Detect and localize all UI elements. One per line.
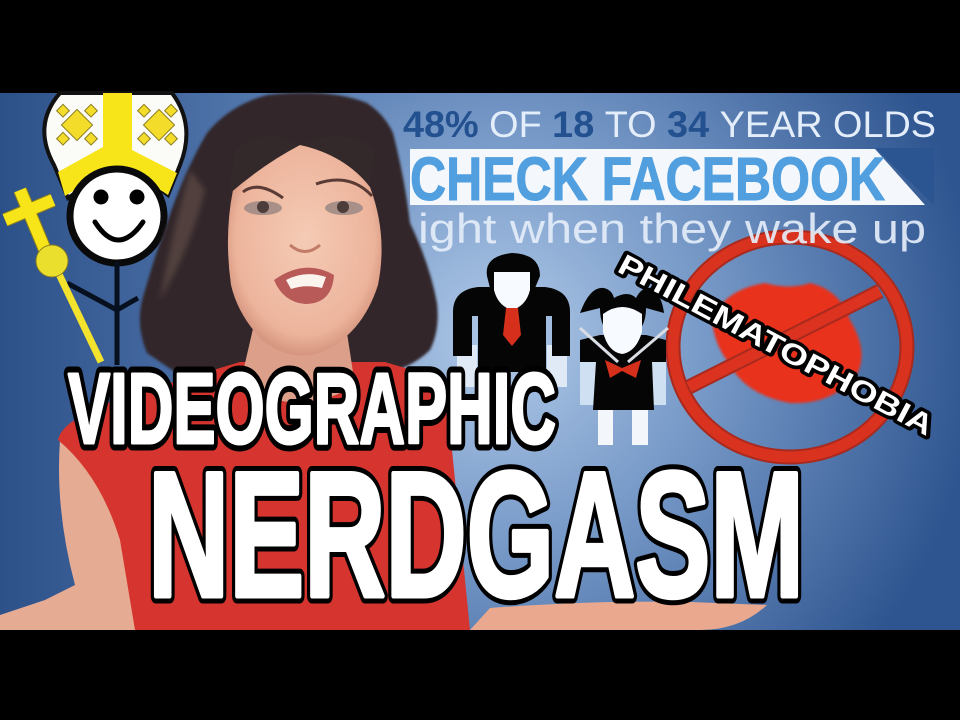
- brows: [243, 187, 283, 198]
- cross: [5, 190, 53, 250]
- hand: [470, 602, 767, 630]
- bow: [605, 360, 641, 378]
- figure: schoolgirl in sailor uniform: [580, 288, 668, 445]
- mouth: [274, 268, 334, 304]
- icon: no-kissing sign: [673, 237, 907, 457]
- mitre: [44, 93, 186, 198]
- figure: stick-figure pope: [5, 93, 186, 365]
- title: videographic: VIDEOGRAPHIC: [68, 353, 556, 465]
- neck: [240, 320, 355, 402]
- face: [494, 272, 530, 310]
- hands: [457, 345, 477, 387]
- hair: [487, 253, 540, 288]
- mitre ornaments: [57, 104, 177, 145]
- staff: [58, 272, 101, 362]
- face: [228, 145, 382, 356]
- hair: [140, 93, 438, 380]
- subhead: right when they wake up: ight when they wake up: [418, 205, 926, 252]
- hair highlight: [160, 170, 205, 300]
- collar: [580, 328, 668, 362]
- pigtails and hair: [580, 288, 664, 336]
- legs: [598, 405, 613, 445]
- eyes: [244, 201, 282, 215]
- red dress: [58, 362, 470, 630]
- figure: man in suit: [453, 253, 570, 387]
- head: [70, 169, 164, 263]
- fringe: [228, 136, 300, 195]
- title: videographic: VIDEOGRAPHIC: [68, 353, 556, 465]
- body and arms: [67, 262, 138, 365]
- nose: [290, 245, 320, 252]
- photo: presenter: [0, 93, 767, 630]
- left arm: [0, 440, 150, 630]
- background: blue gradient panel: [0, 93, 960, 630]
- tie: [503, 308, 521, 346]
- lips: [712, 283, 862, 403]
- label: philematophobia: PHILEMATOPHOBIA: [613, 249, 939, 442]
- title: videographic: [68, 353, 556, 465]
- arms: [580, 350, 596, 405]
- face: [603, 307, 642, 354]
- headline: 48% of 18 to 34 year olds: 48% OF 18 TO 34 YEAR OLDS: [403, 104, 936, 145]
- orb: [36, 245, 68, 277]
- sleeves and dress: [580, 335, 666, 410]
- suit: [453, 287, 570, 372]
